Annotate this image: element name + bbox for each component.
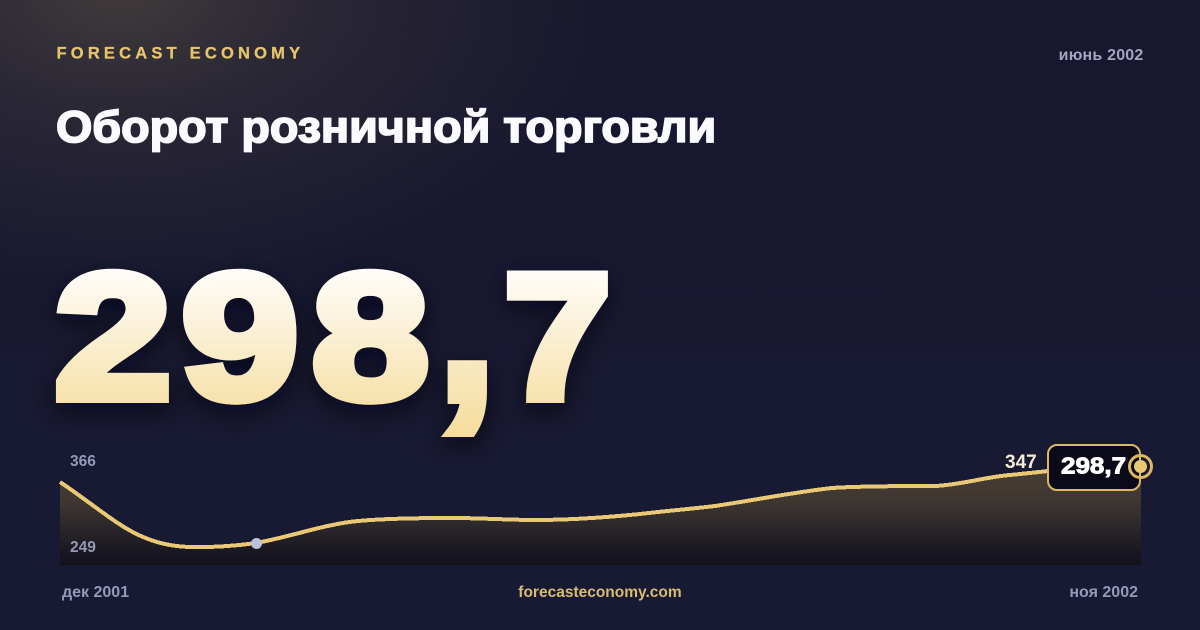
minimum point marker <box>251 538 262 549</box>
title: Оборот розничной торговли <box>56 102 716 152</box>
previous value label: 347 <box>1005 452 1037 473</box>
current point marker <box>1130 456 1152 478</box>
big number <box>55 205 611 443</box>
brand label: FORECAST ECONOMY <box>56 44 304 62</box>
big number: 8 <box>312 238 429 436</box>
maximum axis label: 366 <box>70 453 96 470</box>
big number: , <box>439 205 495 443</box>
chart line <box>60 471 1048 547</box>
end date label: ноя 2002 <box>1069 584 1138 601</box>
source site: forecasteconomy.com <box>518 584 682 601</box>
big number: 7 <box>504 238 611 436</box>
start date label: дек 2001 <box>62 584 129 601</box>
area chart <box>60 445 1152 565</box>
chart area fill <box>60 467 1141 565</box>
big number: 2 <box>55 238 171 436</box>
date label: июнь 2002 <box>1059 47 1144 64</box>
minimum axis label: 249 <box>70 539 96 556</box>
big number: 9 <box>182 238 298 436</box>
current value callout <box>1048 445 1140 490</box>
current value callout: 298,7 <box>1061 454 1126 479</box>
